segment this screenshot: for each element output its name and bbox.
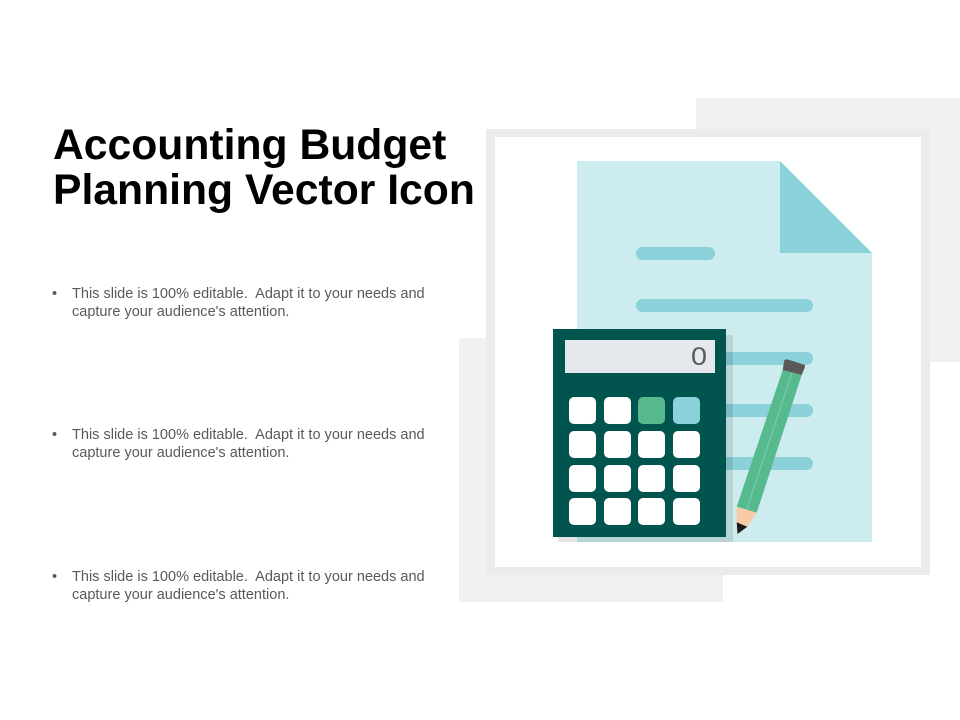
picture frame (486, 129, 930, 575)
bullet text 2: • (52, 427, 57, 443)
title: Accounting Budget (53, 121, 446, 169)
title: Planning Vector Icon (53, 166, 475, 214)
icon: calculator (553, 329, 733, 542)
bullet text 3: • (52, 569, 57, 585)
bullet text 1: • (52, 286, 57, 302)
back square bottom left (459, 338, 723, 602)
back square top right (696, 98, 960, 362)
icon: calculator: 0 (691, 343, 707, 371)
title (53, 121, 475, 214)
bullet text 2: This slide is 100% editable. Adapt it to your needs and capture your audience's attention. (72, 427, 425, 461)
bullet text 3: This slide is 100% editable. Adapt it to your needs and capture your audience's attention. (72, 569, 425, 603)
bullet text 1: This slide is 100% editable. Adapt it to your needs and capture your audience's attention. (72, 286, 425, 320)
icon: pencil (737, 359, 805, 534)
icon: document (577, 161, 872, 542)
